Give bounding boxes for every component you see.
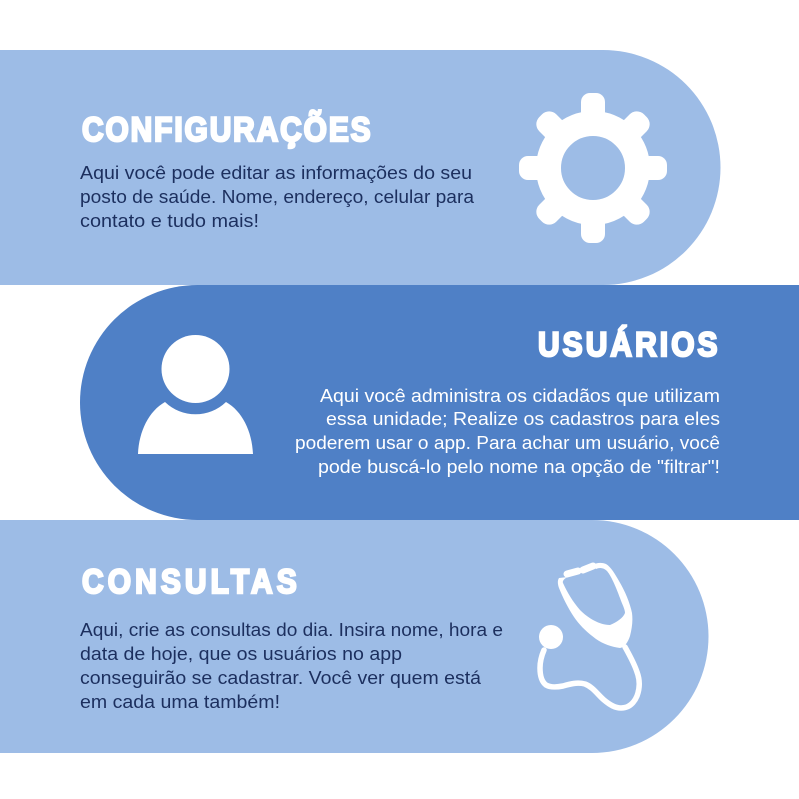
text: configurações description: Aqui você pode editar as informações do seu bbox=[80, 163, 472, 183]
text: configurações description bbox=[80, 163, 475, 231]
text: consultas description: Aqui, crie as consultas do dia. Insira nome, hora e bbox=[80, 620, 503, 640]
text: consultas description: conseguirão se cadastrar. Você ver quem está bbox=[80, 668, 482, 688]
icon: user bbox=[138, 335, 253, 454]
text: configurações description: posto de saúde. Nome, endereço, celular para bbox=[80, 187, 475, 207]
panel: consultas bbox=[0, 520, 708, 753]
heading: consultas: CONSULTAS bbox=[82, 562, 297, 600]
text: usuários description bbox=[295, 386, 720, 477]
text: consultas description bbox=[80, 620, 503, 712]
text: usuários description: pode buscá-lo pelo nome na opção de "filtrar"! bbox=[318, 457, 720, 477]
text: usuários description: Aqui você administra os cidadãos que utilizam bbox=[320, 386, 720, 406]
heading: configurações: CONFIGURAÇÕES bbox=[82, 110, 371, 148]
icon: gear bbox=[519, 93, 667, 243]
text: usuários description: essa unidade; Realize os cadastros para eles bbox=[326, 409, 720, 429]
text: consultas description: data de hoje, que os usuários no app bbox=[80, 644, 402, 664]
heading: usuários: USUÁRIOS bbox=[538, 325, 718, 363]
text: configurações description: contato e tudo mais! bbox=[80, 211, 259, 231]
text: usuários description: poderem usar o app. Para achar um usuário, você bbox=[295, 433, 720, 453]
text: consultas description: em cada uma também! bbox=[80, 692, 280, 712]
panel: usuários bbox=[80, 285, 799, 520]
panel: configurações bbox=[0, 50, 720, 285]
icon: stethoscope bbox=[539, 563, 639, 708]
